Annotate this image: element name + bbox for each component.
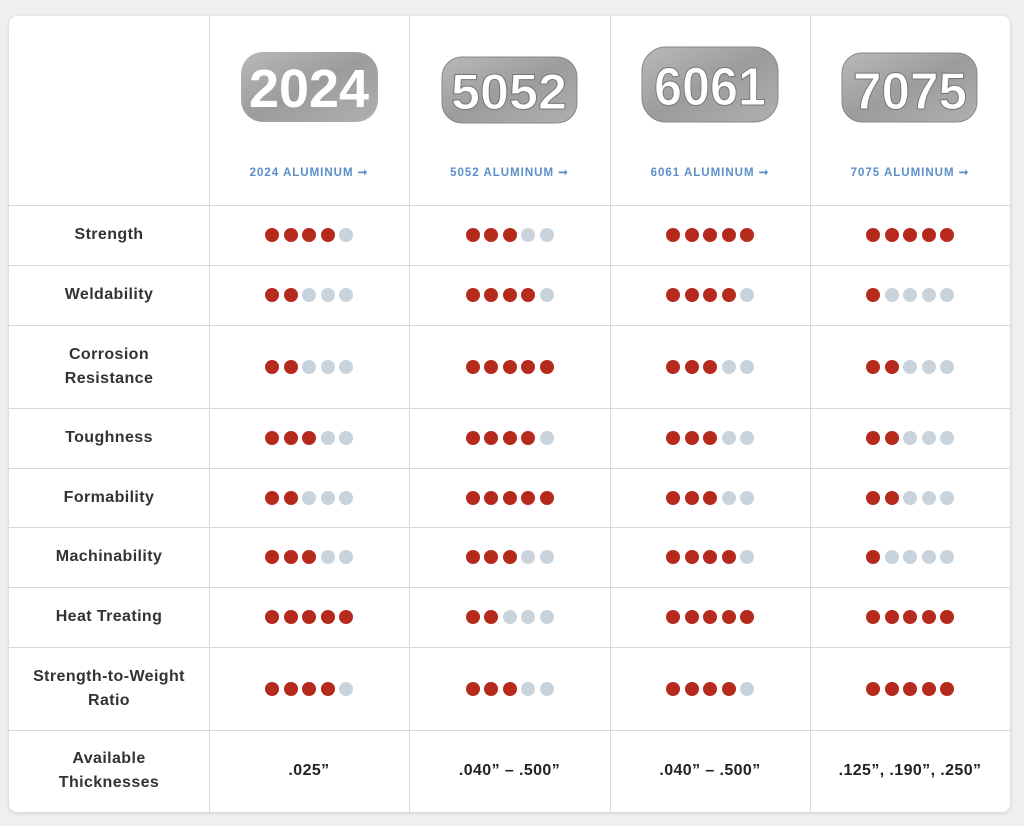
row label: Toughness: Toughness: [65, 429, 153, 446]
link: 5052 aluminum: 5052 ALUMINUM ➞: [450, 167, 569, 179]
icon: 5052 plate: 5052: [451, 64, 567, 120]
row label: Available Thicknesses: Thicknesses: [59, 774, 159, 791]
icon: 5052 plate: [442, 57, 577, 123]
thicknesses row: .040” – .500”: [459, 762, 560, 779]
row label: Corrosion Resistance: [65, 346, 153, 386]
row label: Machinability: Machinability: [56, 548, 162, 565]
link: 7075 aluminum: 7075 ALUMINUM ➞: [851, 167, 969, 179]
thicknesses row: .025”: [288, 762, 330, 779]
row label: Available Thicknesses: [58, 750, 159, 791]
thicknesses row: [288, 762, 981, 779]
icon: 7075 plate: 7075: [853, 63, 967, 121]
rating dots: Heat Treating: [265, 610, 954, 624]
link: 6061 aluminum: 6061 ALUMINUM ➞: [651, 167, 769, 179]
rating dots: Machinability: [265, 550, 954, 564]
row label: Strength-to-Weight Ratio: [33, 668, 185, 708]
row label: Weldability: Weldability: [65, 286, 153, 303]
thicknesses row: .040” – .500”: [659, 762, 761, 779]
row label: Strength-to-Weight Ratio: Ratio: [88, 692, 130, 708]
rating dots: Weldability: [265, 288, 954, 302]
icon: 2024 plate: 2024: [249, 59, 369, 119]
row label: Corrosion Resistance: Resistance: [65, 370, 153, 386]
row label: Formability: Formability: [64, 488, 154, 506]
link: 2024 aluminum: 2024 ALUMINUM ➞: [250, 167, 368, 179]
row label: Strength-to-Weight Ratio: Strength-to-Weight: [33, 668, 185, 684]
header: alloy plates: [241, 46, 978, 124]
row label: Corrosion Resistance: Corrosion: [69, 346, 149, 362]
rating dots: Toughness: [265, 431, 954, 445]
rating dots: Strength: [265, 228, 954, 242]
row label: Available Thicknesses: Available: [72, 750, 146, 767]
row label: Heat Treating: Heat Treating: [56, 608, 162, 625]
rating dots: Formability: [265, 491, 954, 505]
rating dots: Corrosion Resistance: [265, 360, 954, 374]
icon: 6061 plate: 6061: [654, 57, 766, 117]
rating dots: Strength-to-Weight Ratio: [265, 682, 954, 696]
thicknesses row: .125”, .190”, .250”: [839, 762, 981, 779]
row label: Strength: Strength: [74, 226, 143, 243]
